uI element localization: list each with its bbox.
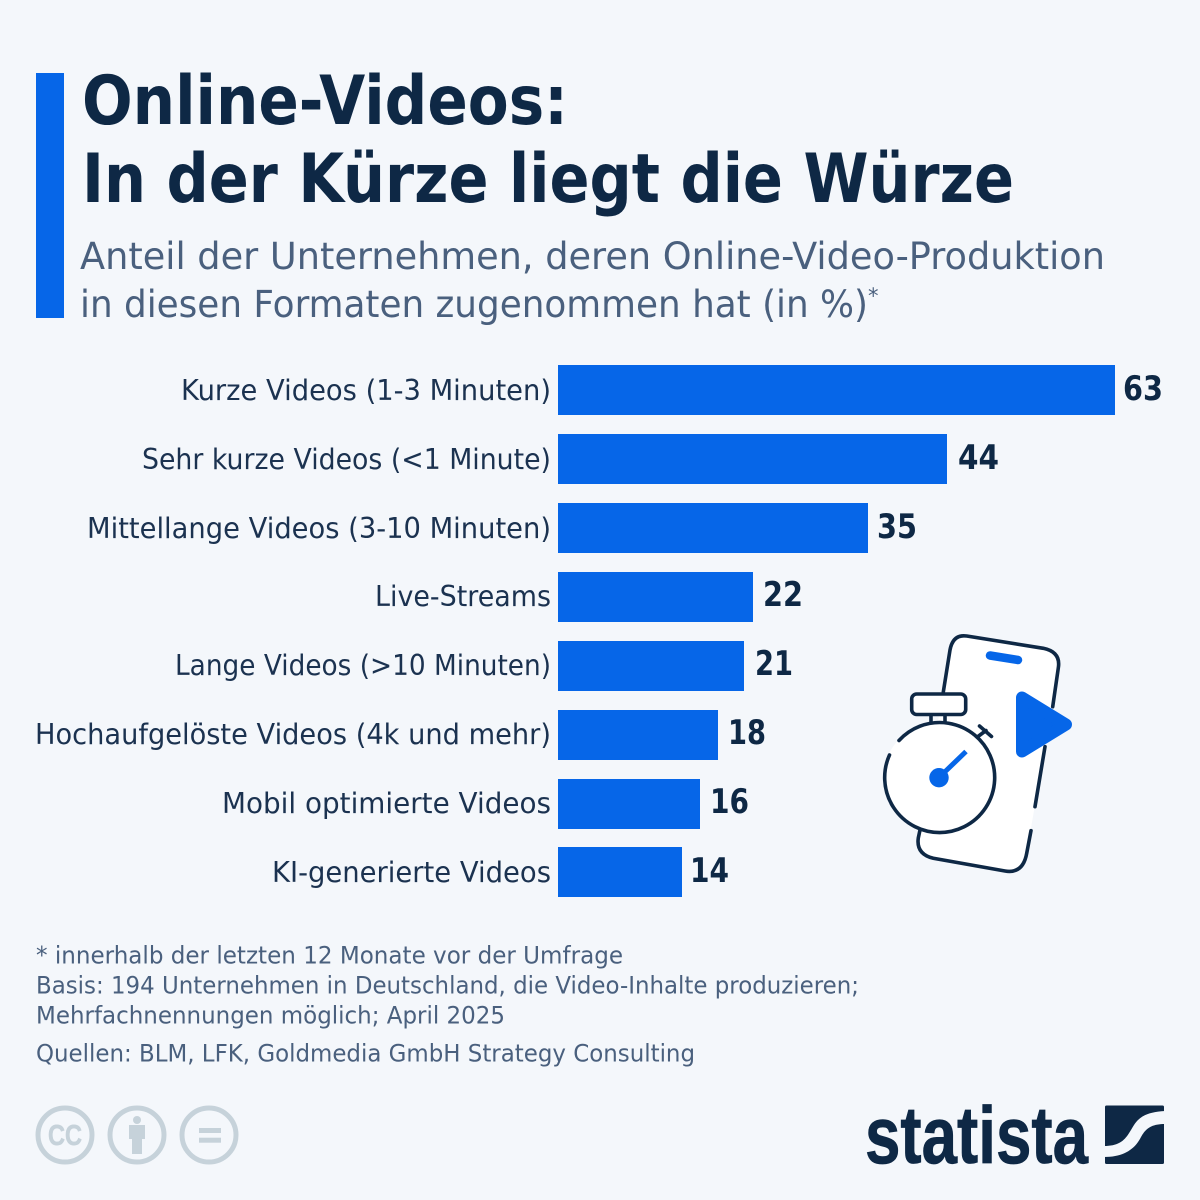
bar row: KI-generierte Videos: 14	[690, 851, 729, 891]
licence icons	[38, 1108, 236, 1162]
bar row: Live-Streams: Live-Streams	[375, 580, 551, 613]
bar row: Lange Videos: Lange Videos (>10 Minuten)	[175, 649, 551, 682]
footnote	[36, 942, 859, 1030]
play button	[1022, 698, 1066, 752]
bar row: Hochaufgelöste Videos: Hochaufgelöste Videos (4k und mehr)	[35, 718, 551, 751]
wordmark: statista	[865, 1091, 1089, 1181]
bar row: Mobil optimierte Videos: 16	[710, 782, 749, 822]
bar row: Hochaufgelöste Videos	[35, 710, 766, 760]
bar row: Mittellange Videos	[87, 503, 917, 553]
bar row: Sehr kurze Videos	[142, 434, 999, 484]
bar row: Sehr kurze Videos: Sehr kurze Videos (<1 Minute)	[142, 443, 551, 476]
bar row: Kurze Videos: Kurze Videos (1-3 Minuten)	[181, 374, 551, 407]
icon: phone with stopwatch and play button	[884, 636, 1066, 871]
bar row: Kurze Videos: 63	[1123, 369, 1163, 409]
subtitle: *	[868, 284, 878, 308]
bar row: Lange Videos: 21	[755, 644, 793, 684]
logo mark	[1104, 1106, 1165, 1164]
title	[82, 62, 1014, 219]
bar row: KI-generierte Videos	[272, 847, 729, 897]
bar row: Lange Videos	[175, 641, 793, 691]
statista logo	[865, 1091, 1165, 1181]
icon: creative commons	[38, 1108, 92, 1162]
icon: no derivatives	[182, 1108, 236, 1162]
bar row: Hochaufgelöste Videos: 18	[728, 713, 766, 753]
footnote: Mehrfachnennungen möglich; April 2025	[36, 1002, 505, 1030]
icon: attribution person	[110, 1108, 164, 1162]
bar row: Mobil optimierte Videos	[222, 779, 749, 829]
subtitle: in diesen Formaten zugenommen hat (in %)	[80, 283, 868, 326]
stopwatch	[884, 694, 995, 833]
title: In der Kürze liegt die Würze	[82, 140, 1014, 219]
subtitle	[80, 235, 1105, 326]
bar chart	[35, 365, 1163, 897]
title: Online-Videos:	[82, 62, 568, 141]
bar row: Live-Streams: 22	[763, 575, 803, 615]
footnote: Basis: 194 Unternehmen in Deutschland, die Video-Inhalte produzieren;	[36, 972, 859, 1000]
bar row: Sehr kurze Videos: 44	[958, 438, 999, 478]
subtitle: Anteil der Unternehmen, deren Online-Video-Produktion	[80, 235, 1105, 278]
bar row: Live-Streams	[375, 572, 803, 622]
bar row: Mittellange Videos: 35	[877, 507, 917, 547]
header accent bar	[36, 73, 64, 318]
footnote: * innerhalb der letzten 12 Monate vor der Umfrage	[36, 942, 623, 970]
bar row: KI-generierte Videos: KI-generierte Videos	[272, 856, 551, 889]
icon: creative commons: CC	[48, 1120, 82, 1152]
phone body	[918, 636, 1059, 871]
bar row: Kurze Videos	[181, 365, 1163, 415]
bar row: Mobil optimierte Videos: Mobil optimierte Videos	[222, 787, 551, 820]
bar row: Mittellange Videos: Mittellange Videos (3-10 Minuten)	[87, 512, 551, 545]
source line: Quellen: BLM, LFK, Goldmedia GmbH Strategy Consulting	[36, 1040, 695, 1068]
